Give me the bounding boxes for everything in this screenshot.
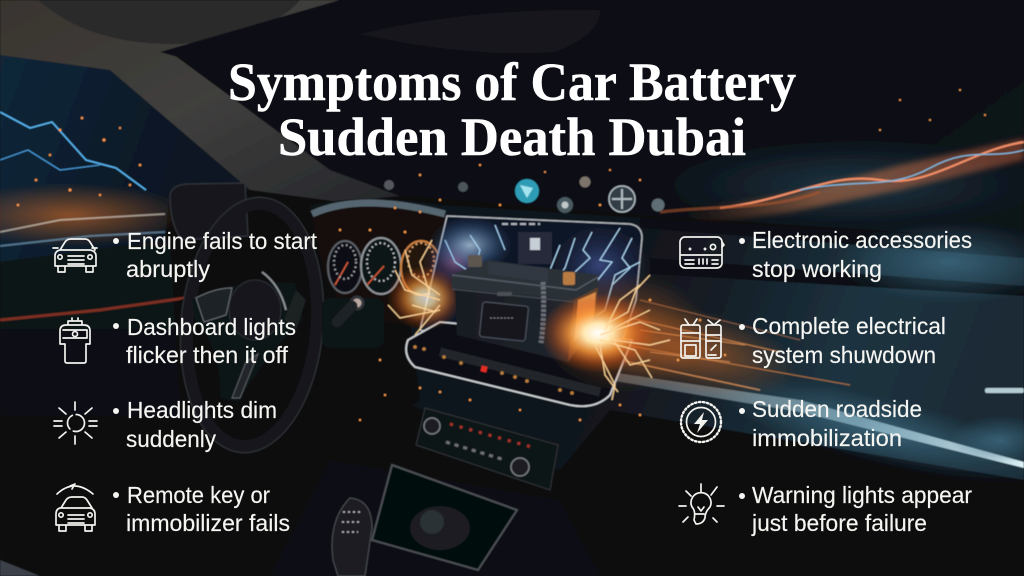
left symptoms column [53,228,318,536]
symptom: headlights dim: Headlights dim [127,397,277,423]
symptom: roadside immobilization: Sudden roadside [752,396,922,422]
dash upper trim [640,218,1024,258]
gear shifter [332,498,372,576]
roof and A-pillar [0,0,400,202]
flying sparks [339,89,986,421]
symptom: electronic accessories: Electronic accessories [752,227,972,253]
left side window [0,55,250,262]
symptom: warning lights [679,482,972,536]
symptom: engine fails: abruptly [126,256,211,282]
symptom: electrical shutdown: Complete electrical [752,313,946,339]
symptom: warning lights: Warning lights appear [752,482,972,508]
symptom: warning lights: just before failure [751,510,927,536]
side window lightning and streaks [0,112,190,247]
instrument cluster [312,202,450,335]
lightning on the screen [445,225,640,320]
right symptoms column [679,227,972,536]
ignition stalk [322,297,384,348]
title [228,52,796,167]
symptom: electrical shutdown: system shuwdown [752,342,936,368]
symptom: headlights dim [54,397,277,452]
symptom: engine fails [53,228,318,282]
lower dash centre [180,250,420,576]
symptom: remote key: immobilizer fails [126,510,290,536]
floating part icons [384,176,664,213]
battery [452,255,598,362]
title: Sudden Death Dubai [278,107,746,167]
right explosion core [540,293,656,373]
door panel and accent line [0,240,190,576]
symptom: electronic accessories: stop working [752,256,882,282]
side mirror [170,183,248,240]
symptom: dashboard lights: flicker then it off [126,342,289,368]
steering wheel [170,191,334,459]
center console with white rim [406,322,632,406]
orange lightning bolts [388,240,670,400]
center screen [420,216,648,378]
climate control panel [416,408,558,490]
symptom: electrical shutdown [681,313,946,368]
symptom: remote key: Remote key or [127,482,270,508]
teal glow under the beam [707,356,1024,504]
lower center console [270,460,600,576]
sun visor [38,0,300,44]
symptom: roadside immobilization: immobilization [752,425,902,451]
symptom: electronic accessories [680,227,972,282]
symptom: remote key [56,482,290,536]
dashboard body [310,199,1024,576]
orange spark trail, right [574,286,850,414]
symptom: headlights dim: suddenly [126,426,216,452]
symptom: roadside immobilization [681,396,922,451]
symptom: dashboard lights: Dashboard lights [127,314,296,340]
windshield light streaks [660,138,1024,230]
symptom: dashboard lights [60,314,296,368]
right beam [610,372,1024,468]
windshield night sky [170,0,1024,240]
symptom: engine fails: Engine fails to start [127,228,318,254]
lower right dark dash panel [560,410,1024,576]
explosion glow behind battery [387,217,710,392]
title: Symptoms of Car Battery [228,52,796,112]
